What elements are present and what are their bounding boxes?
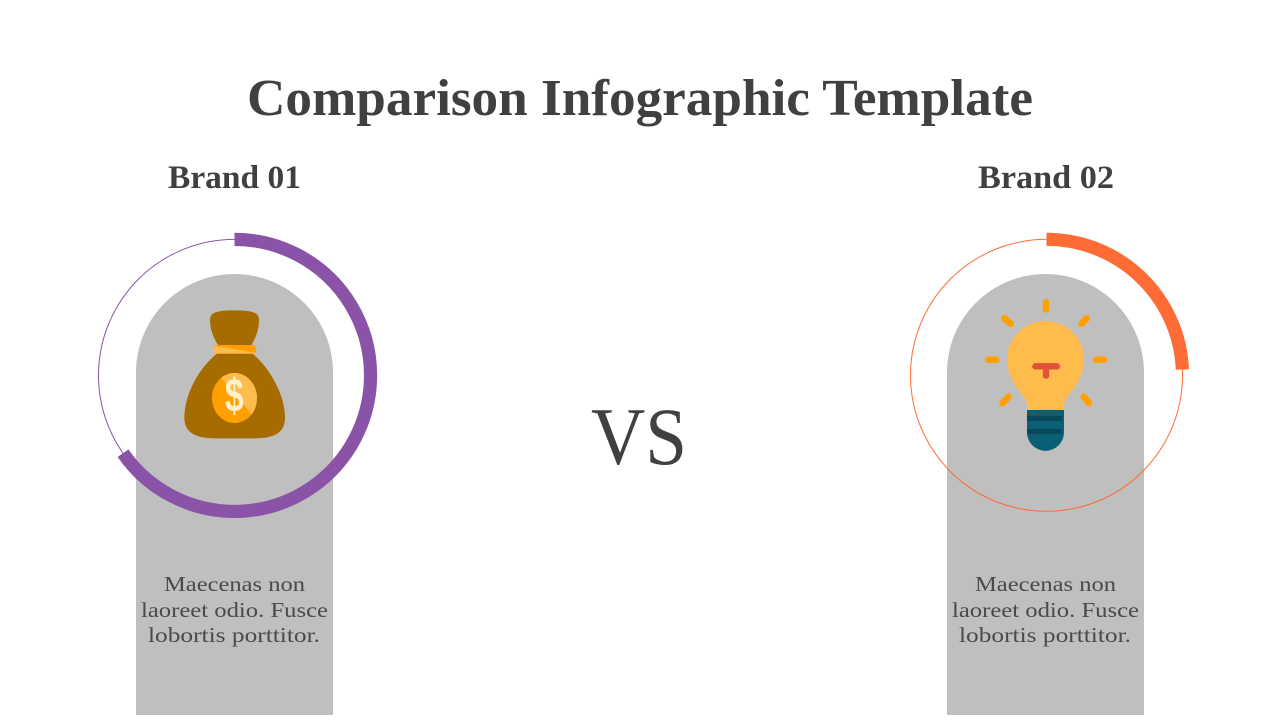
grey pill background — [136, 274, 333, 715]
description: brand 02: Maecenas non — [975, 572, 1116, 596]
bulb rays — [988, 302, 1104, 403]
description: brand 02: laoreet odio. Fusce — [952, 598, 1139, 622]
panel: brand 01 — [98, 160, 371, 715]
icon: money bag — [184, 310, 285, 438]
icon: money bag: $ — [225, 369, 244, 422]
description: brand 02 — [952, 572, 1139, 647]
panel: brand 02 — [910, 160, 1182, 715]
description: brand 02: lobortis porttitor. — [959, 623, 1131, 647]
versus label: VS — [591, 391, 687, 482]
title: Comparison Infographic Template — [247, 70, 1033, 127]
description: brand 01: lobortis porttitor. — [148, 623, 320, 647]
description: brand 01 — [141, 572, 328, 647]
description: brand 01: laoreet odio. Fusce — [141, 598, 328, 622]
heading: brand 02: Brand 02 — [978, 160, 1114, 196]
grey pill background — [947, 274, 1144, 715]
heading: brand 01: Brand 01 — [168, 160, 301, 196]
thin progress ring — [98, 239, 370, 511]
thick progress arc — [1046, 239, 1182, 370]
thick progress arc — [123, 239, 371, 511]
thin progress ring — [910, 239, 1182, 511]
icon: light bulb — [988, 302, 1104, 451]
description: brand 01: Maecenas non — [164, 572, 305, 596]
